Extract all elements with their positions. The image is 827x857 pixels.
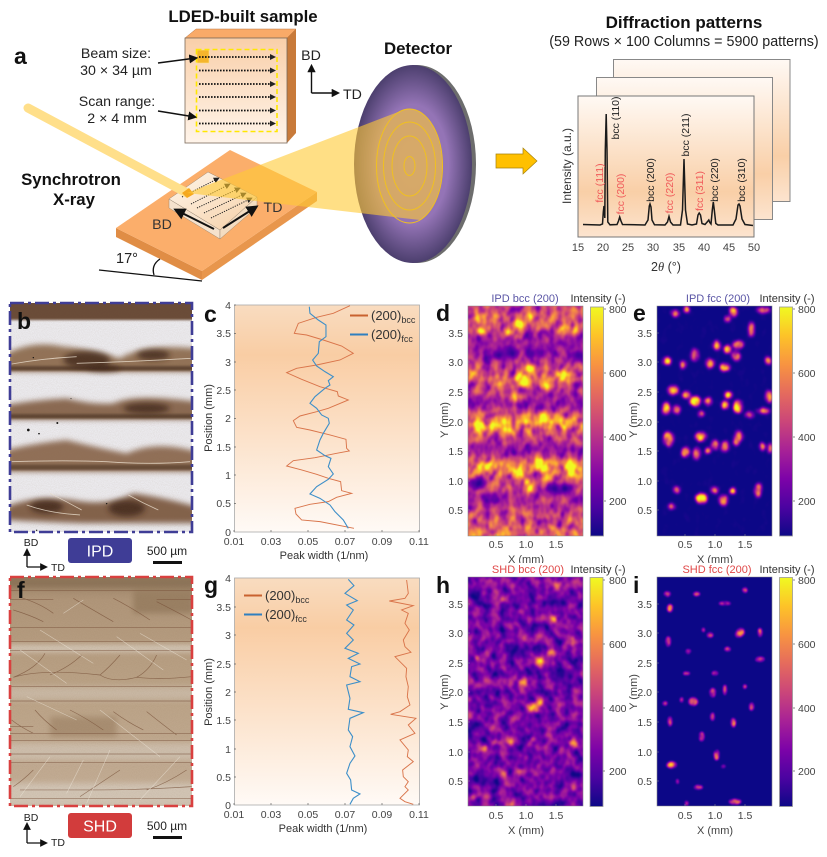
axis labels: 2.5 [448,658,463,670]
axis titles [203,384,368,562]
heading: LDED-built sample: LDED-built sample [168,7,318,26]
axis tick labels: 0.03 [261,536,281,548]
tilted stage plate [116,150,317,280]
panel letter h: h [436,572,450,598]
panel: diffraction patterns [549,13,819,274]
axis labels: 0.5 [489,810,503,822]
axis tick labels: 0.11 [409,536,429,548]
colorbar: Intensity (-) [570,564,626,576]
panel g: peak width profile SHD [203,572,429,835]
axis labels: 1.0 [637,476,652,488]
legend: (200) [371,327,401,342]
heading: SHD fcc (200) [682,564,752,576]
axis tick labels: 0.01 [224,809,244,821]
sample on stage: BD [152,217,172,233]
axis titles: Position (mm) [203,658,215,726]
axis labels: 1.5 [549,810,563,822]
axis labels: 2.5 [448,387,463,399]
axis tick labels: 0.5 [216,498,231,510]
arrow to diffraction patterns [496,148,537,174]
colorbar: 800 [798,575,816,587]
axis labels: X (mm) [697,825,733,837]
axis tick labels: 2 [225,687,231,699]
axis labels: 3.5 [448,599,463,611]
axis labels: 3.0 [448,357,463,369]
heading: Synchrotron X-ray [21,170,121,209]
callout: beam size: Beam size: [81,46,151,62]
axis tick labels: 0.07 [335,536,355,548]
callout: scan range: Scan range: [79,94,155,110]
heading: IPD fcc (200) [686,293,750,305]
plot frame and ticks [468,577,583,806]
axis tick labels [216,300,429,548]
spectrum axes labels: 2θ (°) [651,260,681,274]
axis tick labels: 4 [225,573,231,585]
peak labels [594,96,748,214]
scale bar 500 um: 500 µm [147,544,187,558]
axis titles: Peak width (1/nm) [280,550,368,562]
axis tick labels: 0.5 [216,772,231,784]
subtitle: pattern count: (59 Rows × 100 Columns = 5900 patterns) [549,34,819,50]
spectrum axes labels: 15 [572,242,584,254]
axes: BD and TD: BD [24,537,39,549]
plot frame and ticks [657,306,772,536]
axes: BD and TD: TD [51,837,65,849]
detector disc [354,65,476,263]
panel c: peak width profile IPD [203,300,429,562]
panel letter e: e [633,300,646,326]
axis labels: Y (mm) [439,674,451,710]
spectrum axes labels: 25 [622,242,634,254]
colorbar: 200 [609,766,627,778]
axis tick labels [216,573,429,821]
axis labels: 1.5 [549,539,563,551]
panel d: IPD bcc map [436,293,627,566]
axis labels: 0.5 [448,505,463,517]
axis labels: Y (mm) [628,674,640,710]
axes: BD and TD [24,812,65,849]
axis tick labels: 3.5 [216,328,231,340]
curve: fcc peak width [309,307,348,528]
peak labels: bcc (211) [680,114,692,156]
colorbar: 600 [798,639,816,651]
axis tick labels: 4 [225,300,231,312]
spectrum axes labels: 30 [647,242,659,254]
axis tick labels: 0 [225,527,231,539]
colorbar: 600 [609,368,627,380]
peak labels: bcc (200) [645,158,657,202]
colorbar: Intensity (-) [759,564,815,576]
label: SHD: SHD [83,818,117,836]
axis tick labels: 2 [225,413,231,425]
axis labels: 2.0 [448,687,463,699]
axis labels: 1.0 [519,810,533,822]
peak labels: bcc (220) [709,158,721,202]
axis tick labels: 1.5 [216,715,231,727]
axis tick labels: 1.5 [216,442,231,454]
colorbar: 400 [798,703,816,715]
heading: SHD bcc (200) [492,564,564,576]
heading: Detector: Detector [384,39,453,58]
colorbar [759,293,816,536]
axis labels: 0.5 [448,776,463,788]
axis tick labels: 0.01 [224,536,244,548]
colorbar: 200 [798,496,816,508]
axis tick labels: 2.5 [216,659,231,671]
axis labels: 1.5 [637,717,652,729]
colorbar [759,564,816,806]
panel a: synchrotron setup [14,7,476,281]
axis labels: 1.0 [708,539,722,551]
legend: (200) [371,308,401,323]
axis labels: 1.5 [448,446,463,458]
sample on stage: TD [264,200,282,216]
callout: scan range: 2 × 4 mm [87,111,147,127]
plot frame and ticks [657,577,772,806]
spectrum axes labels: 45 [723,242,735,254]
axis labels: 3.0 [637,357,652,369]
axis tick labels: 0.03 [261,809,281,821]
panel letter g: g [204,572,218,598]
colorbar: 400 [609,432,627,444]
axis tick labels: 2.5 [216,385,231,397]
colorbar: 200 [798,766,816,778]
label: IPD [68,538,132,563]
axis labels: Y (mm) [439,402,451,438]
heatmap [657,306,772,536]
axis labels [439,328,563,566]
legend [350,308,416,344]
spectrum axes labels: 35 [673,242,685,254]
stacked pattern cards [578,60,790,237]
axis titles: Peak width (1/nm) [279,823,367,835]
colorbar [570,293,627,536]
plot background [234,305,420,532]
spectrum axes labels: Intensity (a.u.) [560,128,574,204]
diffraction spectrum [583,114,753,226]
spectrum axes labels: 40 [698,242,710,254]
axis tick labels: 0.09 [372,536,392,548]
axis labels: 2.5 [637,658,652,670]
axis labels: 3.0 [637,628,652,640]
colorbar: Intensity (-) [570,293,626,305]
axis labels: 1.0 [448,476,463,488]
colorbar: 400 [798,432,816,444]
axis labels: 2.5 [637,387,652,399]
Debye rings [376,109,442,223]
legend: (200) [265,588,295,603]
axis tick labels: 0.05 [298,809,318,821]
axis labels: X (mm) [508,825,544,837]
axis tick labels: 0.09 [372,809,392,821]
panel h: SHD bcc map [436,564,627,837]
panel letter a: a [14,43,27,69]
legend: bcc [401,315,416,325]
colorbar: 600 [609,639,627,651]
axis labels: 2.0 [448,417,463,429]
curve: fcc peak width [345,579,363,804]
axis tick labels: 1 [225,744,231,756]
axis labels: 1.0 [637,747,652,759]
colorbar: Intensity (-) [759,293,815,305]
axis labels: 1.0 [519,539,533,551]
legend: fcc [401,334,413,344]
panel f: SHD micrograph [7,575,197,849]
micrograph image [3,300,200,533]
axis tick labels: 3.5 [216,602,231,614]
axis labels: 1.0 [708,810,722,822]
colorbar: 800 [798,304,816,316]
axes: BD and TD: TD [343,87,362,103]
axis labels: 1.5 [637,446,652,458]
peak labels: bcc (110) [610,96,622,140]
axis labels: 3.5 [637,599,652,611]
colorbar: 600 [798,368,816,380]
axis labels: 0.5 [489,539,503,551]
axis tick labels: 3 [225,630,231,642]
axes: BD and TD: BD [24,812,39,824]
spectrum axes labels: 20 [597,242,609,254]
axis tick labels: 0.07 [335,809,355,821]
sample on stage [152,172,282,239]
scale bar 500 um: 500 µm [147,819,187,833]
panel letter c: c [204,301,217,327]
axis labels [628,599,752,837]
dash-dot border [10,577,192,806]
axis tick labels: 0 [225,800,231,812]
angle marker 17 degrees: 17° [116,251,138,267]
spectrum axes labels: 50 [748,242,760,254]
axis labels: Y (mm) [628,402,640,438]
axis labels: 3.5 [637,328,652,340]
legend: fcc [295,614,307,624]
axis labels: X (mm) [508,554,544,566]
peak labels: fcc (220) [664,173,676,213]
axis tick labels: 3 [225,357,231,369]
dash-dot border [10,303,192,532]
label: IPD: IPD [87,544,113,560]
axis tick labels: 1 [225,470,231,482]
panel letter i: i [633,572,639,598]
legend [244,588,310,624]
heading: Diffraction patterns: Diffraction patterns [606,13,762,32]
axis labels: 0.5 [678,810,692,822]
axis labels: 1.5 [738,810,752,822]
axes: BD and TD: TD [51,562,65,574]
plot frame and ticks [468,306,583,536]
plot background [234,578,420,805]
axis tick labels: 0.05 [298,536,318,548]
incident x-ray beam [28,108,194,198]
LDED sample block with scan grid [185,29,296,143]
axes: BD and TD [24,537,65,574]
panel letter f: f [17,577,25,603]
colorbar: 800 [609,575,627,587]
axis labels: X (mm) [697,554,733,566]
axis labels: 1.5 [738,539,752,551]
axis labels: 2.0 [637,417,652,429]
axis labels: 1.5 [448,717,463,729]
scale bar 500 um [147,544,187,564]
axis labels: 3.0 [448,628,463,640]
angle marker 17 degrees [99,251,202,281]
curve: bcc peak width [287,306,354,528]
axis labels [439,599,563,837]
heading: Synchrotron X-ray: X-ray [53,190,96,209]
peak labels: fcc (111) [594,163,606,203]
axis labels [628,328,752,566]
legend: bcc [295,595,310,605]
axes: BD and TD [301,48,362,103]
callout: scan range [79,94,195,127]
colorbar: 200 [609,496,627,508]
heading: IPD bcc (200) [491,293,559,305]
peak labels: fcc (200) [615,174,627,214]
legend: (200) [265,607,295,622]
label: SHD [68,813,132,838]
axis labels: 3.5 [448,328,463,340]
panel letter b: b [17,308,31,334]
callout: beam size [80,46,196,79]
colorbar [570,564,627,806]
peak labels: bcc (310) [736,158,748,202]
colorbar: 400 [609,703,627,715]
axis labels: 0.5 [637,505,652,517]
axis labels: 0.5 [637,776,652,788]
axis labels: 2.0 [637,687,652,699]
axis titles [203,658,367,835]
panel b: IPD micrograph [3,300,200,574]
panel i: SHD fcc map [628,564,816,837]
heatmap [657,577,772,806]
scale bar 500 um [147,819,187,839]
colorbar: 800 [609,304,627,316]
panel e: IPD fcc map [628,293,816,566]
axis tick labels: 0.11 [409,809,429,821]
heading: Synchrotron X-ray: Synchrotron [21,170,121,189]
micrograph image [7,575,197,808]
axis labels: 1.0 [448,747,463,759]
spectrum axes labels [560,128,760,274]
heatmap [468,306,583,536]
callout: beam size: 30 × 34 µm [80,63,152,79]
curve: bcc peak width [389,580,416,804]
axis labels: 0.5 [678,539,692,551]
peak labels: fcc (311) [694,171,706,211]
panel letter d: d [436,300,450,326]
heatmap [468,577,583,806]
axis titles: Position (mm) [203,384,215,452]
diffracted x-ray cone [187,109,442,220]
axes: BD and TD: BD [301,48,321,64]
